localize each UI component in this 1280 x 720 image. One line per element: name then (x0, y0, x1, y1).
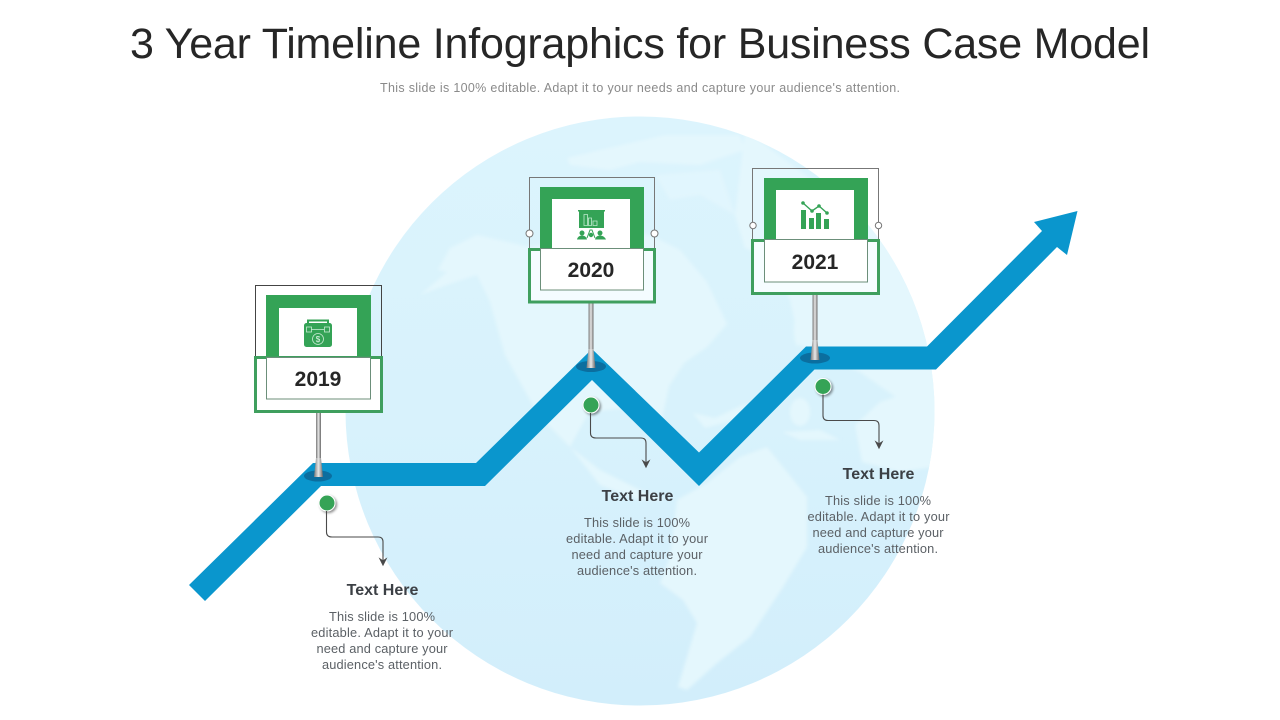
icon: money bag case: $ (316, 335, 321, 344)
text block 2021: audience's attention. (818, 541, 938, 556)
pole 2021 (800, 294, 830, 364)
text block 2021: This slide is 100% (825, 493, 931, 508)
marker dot 2021 (815, 378, 831, 394)
text block 2019: This slide is 100% (329, 609, 435, 624)
text block 2019: editable. Adapt it to your (311, 625, 454, 640)
text block 2019 (311, 582, 454, 672)
text block 2019: audience's attention. (322, 657, 442, 672)
text block 2020: need and capture your (572, 547, 703, 562)
marker dot 2020 (583, 397, 599, 413)
text block 2021: need and capture your (812, 525, 944, 540)
year card 2019: 2019 (295, 368, 341, 391)
pole 2020 (576, 303, 606, 372)
timeline arrow (189, 211, 1078, 601)
year card 2019 (256, 286, 382, 412)
connector arrow 2019 (326, 511, 386, 565)
milestone 2021 (750, 168, 950, 556)
icon: chart with trend (801, 201, 829, 229)
marker dot 2019 (319, 495, 335, 511)
icon: money bag case (304, 320, 332, 347)
text block 2020: audience's attention. (577, 563, 697, 578)
text block 2020 (566, 488, 709, 578)
title: 3 Year Timeline Infographics for Business Case Model (130, 20, 1150, 68)
globe background (340, 110, 960, 710)
text block 2021 (808, 466, 950, 556)
connector arrow 2020 (590, 413, 649, 467)
text block 2021: editable. Adapt it to your (808, 509, 950, 524)
pole 2019 (304, 412, 332, 482)
text block 2020: This slide is 100% (584, 515, 690, 530)
text block 2019: need and capture your (316, 641, 448, 656)
milestone 2019 (256, 286, 454, 672)
text block 2019: Text Here (347, 582, 418, 599)
text block 2020: editable. Adapt it to your (566, 531, 709, 546)
text block 2020: Text Here (602, 488, 673, 505)
text block 2021: Text Here (843, 466, 914, 483)
milestone 2020 (526, 178, 709, 578)
connector arrow 2021 (823, 394, 882, 448)
subtitle: This slide is 100% editable. Adapt it to your needs and capture your audience's attention. (380, 81, 900, 95)
year card 2020 (526, 178, 658, 302)
year card 2021 (750, 168, 882, 294)
year card 2020: 2020 (568, 259, 614, 282)
icon: presentation audience (577, 210, 606, 240)
year card 2021: 2021 (792, 251, 839, 274)
